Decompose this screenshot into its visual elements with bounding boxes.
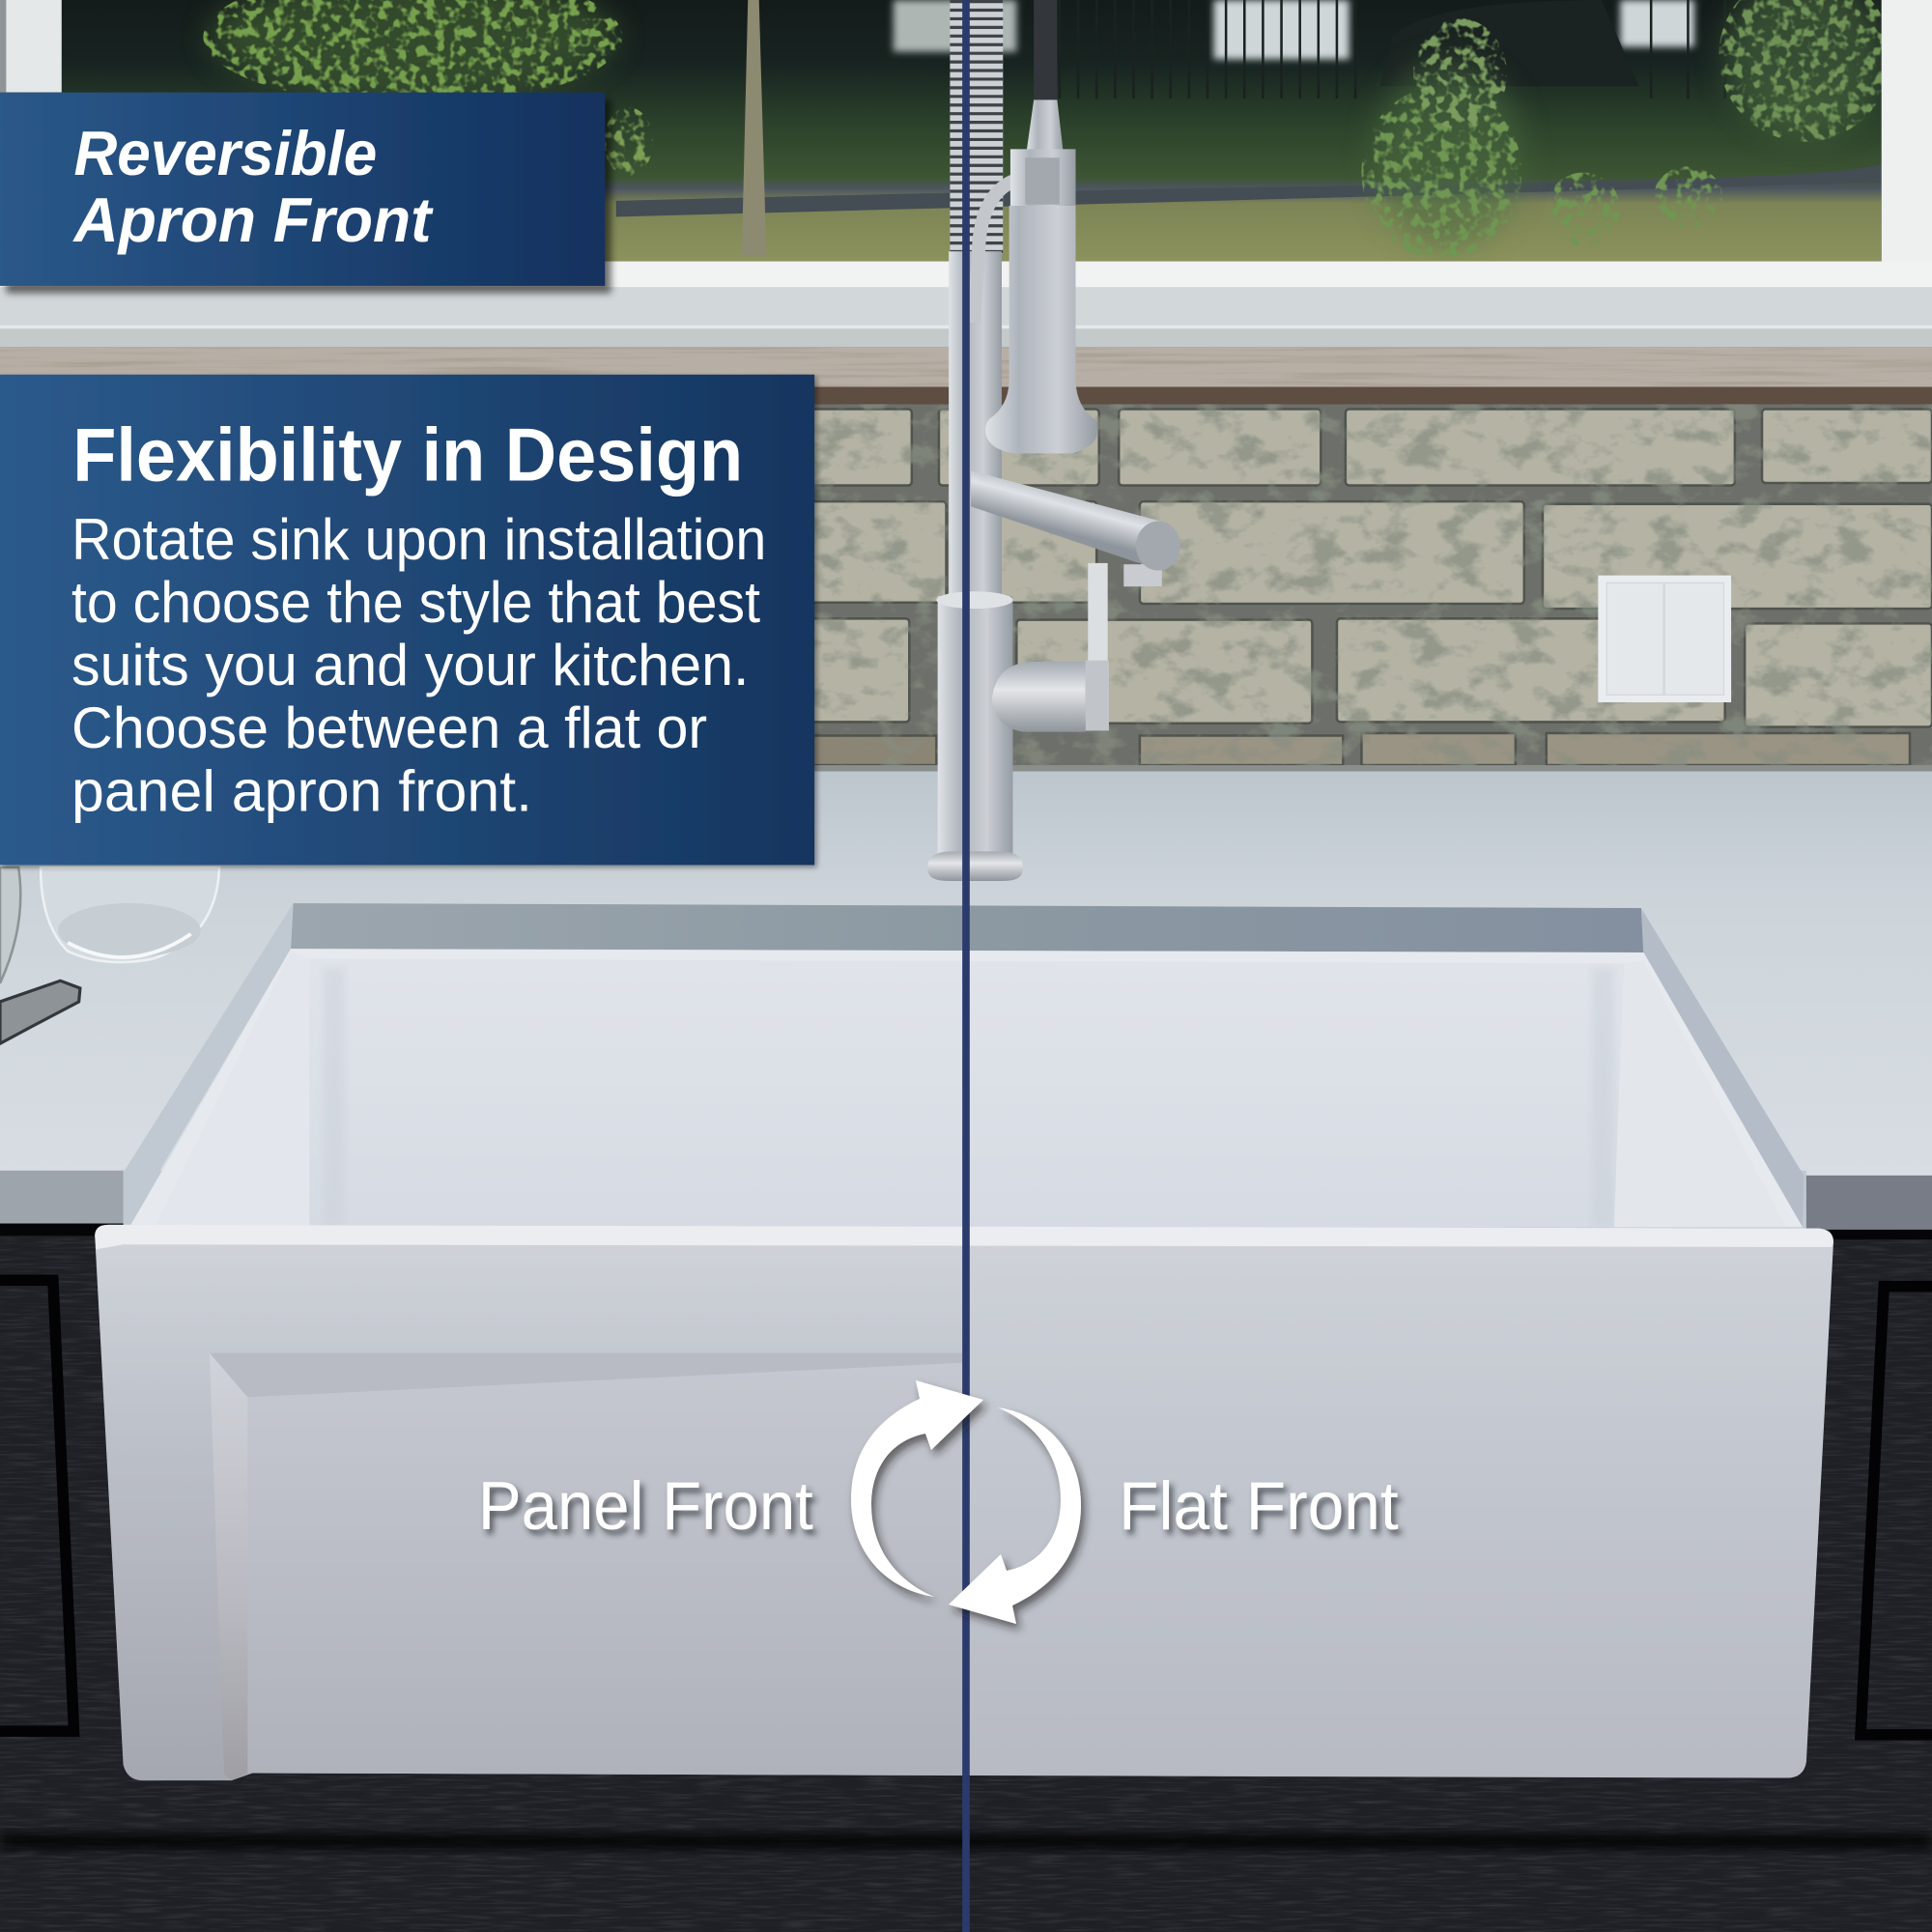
label: Panel Front: Panel Front <box>478 1467 813 1544</box>
heading box: Reversible Apron Front <box>0 93 605 286</box>
heading text <box>72 118 434 255</box>
arrow up-right <box>851 1380 983 1597</box>
info body text: suits you and your kitchen. <box>71 633 750 697</box>
handle <box>992 563 1109 732</box>
napkin <box>0 980 80 1043</box>
wooden shelf <box>0 348 1932 406</box>
spout <box>971 470 1180 586</box>
info body text: Choose between a flat or <box>71 696 707 760</box>
center divider line <box>962 0 970 1932</box>
drinking glass <box>41 867 219 962</box>
arrow down-left <box>949 1407 1081 1624</box>
brick wall <box>739 404 1932 766</box>
spring hose <box>950 0 1003 254</box>
info body text: Rotate sink upon installation <box>71 507 766 572</box>
glass and napkin <box>0 867 219 1043</box>
wall switch <box>1598 576 1731 702</box>
heading text: Reversible <box>74 118 377 188</box>
braided hose and cone <box>1026 0 1064 153</box>
second glass <box>0 867 20 983</box>
sink basin interior <box>125 903 1804 1227</box>
window view background <box>62 0 1891 261</box>
spray head <box>985 149 1097 453</box>
heading text: Apron Front <box>72 185 434 255</box>
info title: Flexibility in Design <box>72 413 743 497</box>
info box: Flexibility in Design <box>0 375 814 865</box>
curved pipe <box>974 182 1012 323</box>
cabinets <box>0 1224 1932 1932</box>
info body text: to choose the style that best <box>71 570 760 635</box>
faucet <box>927 0 1180 881</box>
sink apron <box>95 1225 1833 1780</box>
label: Flat Front: Flat Front <box>1119 1467 1399 1544</box>
window frame <box>0 0 1932 348</box>
countertop <box>0 765 1932 1230</box>
info body text <box>71 507 766 823</box>
faucet column <box>927 251 1023 881</box>
info body text: panel apron front. <box>71 758 532 823</box>
panel front recess <box>210 1353 963 1780</box>
icon: rotation arrows <box>851 1380 1081 1624</box>
